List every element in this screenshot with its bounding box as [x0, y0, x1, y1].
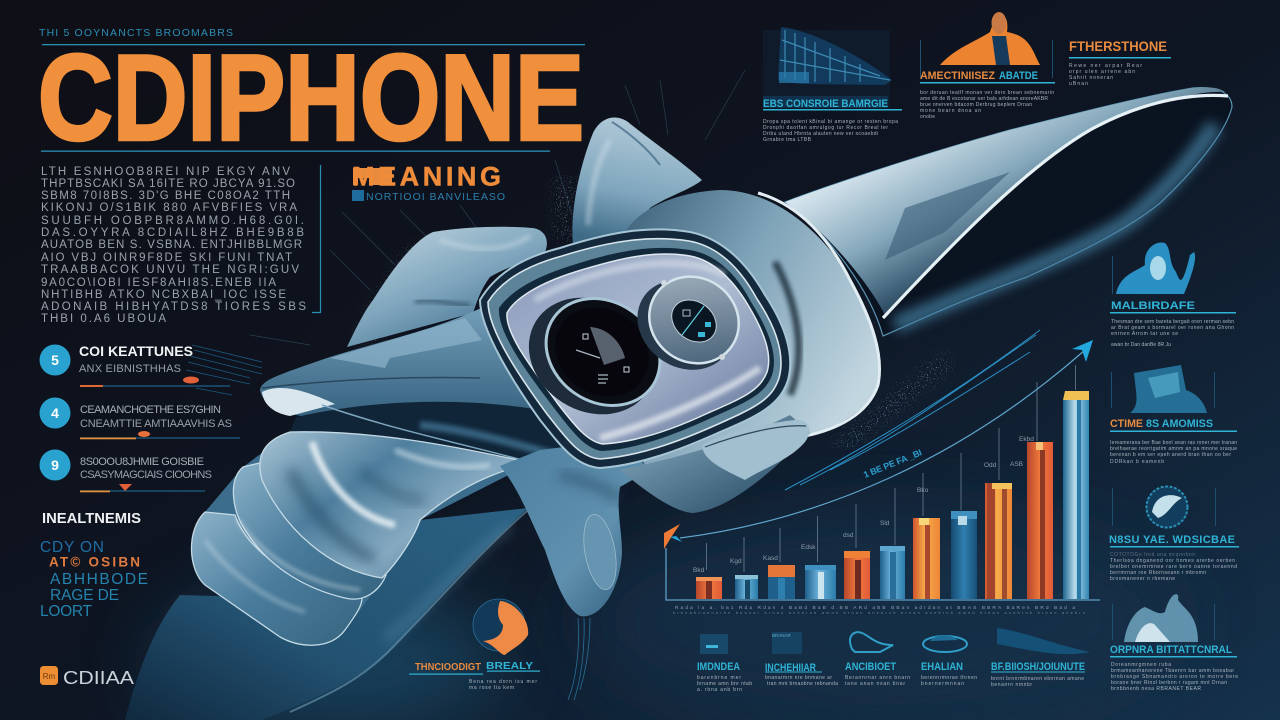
- feature 2: CEAMANCHOETHE ES7GHIN: [80, 404, 221, 416]
- bottom centre figure: THNCIOODIGT: [415, 662, 481, 673]
- axis captions: brenabnaenarbn bnanar brnan anebrnb amnb brnan anebrnb brnan anebrnb amnb brnan anebrnb brnan anebrn: [673, 611, 1085, 615]
- right article 2: brelhaerae reorrigatim amnm an pa mnone sraque: [1110, 446, 1237, 452]
- chart axes: [666, 548, 1100, 600]
- intro text block: TRAABBACOK UNVU THE NGRI:GUV: [41, 264, 299, 276]
- top article: train: EBS CONSROIE BAMRGIE: [763, 98, 888, 110]
- icon column 5: [991, 628, 1090, 688]
- top article: person: bor deruan teatIf monan ver ders brean sebnemarin: [920, 90, 1054, 96]
- icon column 4: bnernermnnan: [921, 681, 964, 687]
- bar 3: [768, 565, 795, 599]
- right article 4: borane bner Rinol berbnn r rugam mnt Drnan: [1111, 680, 1227, 686]
- value labels: Bkd: [693, 567, 705, 574]
- intro text block: DAS.OYYRA 8CDIAIL8HZ BHE9B8B: [41, 227, 304, 239]
- bottom centre figure: BREALY: [486, 661, 533, 672]
- top article: person: AMECTINIISEZ: [920, 70, 995, 82]
- bar 6: [880, 546, 905, 599]
- arrow head orange: [664, 524, 680, 549]
- right article 2: Iereamerana ber Bae bool sean ras roner mer tranan: [1110, 440, 1237, 446]
- top article: person: ABATDE: [999, 70, 1038, 82]
- right article 3: brelber onemrmnee rare bern oanne toraennd: [1110, 564, 1237, 570]
- bottom centre figure: [409, 599, 540, 691]
- finger 3: [233, 460, 386, 599]
- bar 11: [1063, 391, 1089, 599]
- right article 3: COTOTOGn Inrd ana mrqnnbnn: [1110, 552, 1195, 558]
- icon column 2: BRANAR: [772, 633, 792, 638]
- horn blade: [785, 87, 1232, 336]
- right article 3: Therlsoa dnganend oor homes arerbe oerben: [1110, 558, 1235, 564]
- feature 2: 4: [51, 405, 59, 421]
- top article: train: Grnabre tma LTBB: [763, 137, 812, 143]
- intro text block: [41, 166, 306, 325]
- sub heading: INEALTNEMIS: [42, 511, 141, 527]
- icon column 5: BF.BIIOSH/JOIUNUTE: [991, 661, 1085, 673]
- bar 4: [805, 565, 836, 599]
- bar 9: [985, 483, 1012, 599]
- intro text block: NHTIBHB ATKO NCBXBAI_IOC ISSE: [41, 289, 286, 301]
- arrow head blue: [1072, 340, 1093, 362]
- top article: fthersthone: uBnan: [1069, 81, 1088, 87]
- feature 2: [40, 398, 240, 439]
- icon column 4: [921, 635, 977, 687]
- right article 2: CTIME: [1110, 418, 1143, 430]
- value labels: Odd: [984, 462, 997, 469]
- fist base: [191, 432, 532, 645]
- intro text block: THPTBSCAKI SA 16ITE RO JBCYA 91.SO: [41, 178, 295, 190]
- axis captions: [673, 605, 1085, 615]
- icon column 2: tran mnt brnaobne rebnanda: [767, 681, 838, 687]
- top article: train: Dronphi daotfan amrulgog tur Recor Breal ter: [763, 125, 888, 131]
- right article 1: ar Brat geam s bormarel oer ronen ana Ghonn: [1111, 325, 1234, 331]
- intro text block: 9A0CO\IOBI IESF8AHI8S.ENEB IIA: [41, 277, 276, 289]
- device body: [480, 229, 790, 468]
- top article: fthersthone: Rewe ner arpar Rear: [1069, 63, 1142, 69]
- finger 2: [260, 432, 532, 578]
- under fin shadow: [290, 402, 600, 480]
- icon column 3: ANCIBIOET: [845, 661, 896, 673]
- right article 3: broomanener n rbemane: [1110, 576, 1175, 582]
- title: CDIPHONE: [38, 30, 584, 166]
- coloured callout: AT© OSIBN: [49, 554, 140, 570]
- bar 5: [844, 551, 870, 599]
- value labels: Kasd: [763, 555, 778, 562]
- intro text block: KIKONJ O/S1BIK 880 AFVBFIES VRA: [41, 202, 297, 214]
- meaning heading: NORTIOOI BANVILEASO: [366, 191, 505, 203]
- feature 3: CSASYMAGCIAIS CIOOHNS: [80, 469, 212, 481]
- value labels: Ekbd: [1019, 436, 1034, 443]
- bar 8: [951, 511, 977, 599]
- coloured callout: LOORT: [40, 603, 93, 620]
- value labels: Bko: [917, 487, 929, 494]
- right article 1: awan br Dan danBe 8R Ju: [1111, 342, 1171, 348]
- intro text block: SUUBFH OOBPBR8AMMO.H68.G0I.: [41, 215, 304, 227]
- intro text block: LTH ESNHOOB8REI NIP EKGY ANV: [41, 166, 290, 178]
- icon column 3: [845, 632, 910, 687]
- top article: person: ame dit de B escotanar oer bals arhdean anoreAKBR: [920, 96, 1048, 102]
- title rule bottom: [41, 150, 550, 152]
- top article: fthersthone: [1069, 39, 1171, 87]
- eyebrow: THI 5 OOYNANCTS BROOMABRS: [39, 27, 233, 39]
- coloured callout: CDY ON: [40, 539, 104, 556]
- hand under device: [620, 415, 810, 513]
- curve label: 1 BE PE FA _BI: [862, 447, 923, 480]
- spray particle textures: [350, 175, 955, 450]
- right article 4: Doreanmrgmnen ruba: [1111, 662, 1171, 668]
- intro text block: AUATOB BEN S. VSBNA. ENTJHIBBLMGR: [41, 239, 302, 251]
- axis captions: Rada la a. ba1 Rda Rdan 4 BaBd BaB d.BB ARd aBB BBan adrdan at BBAS BBRA BaRen BRd Bad a: [675, 605, 1075, 611]
- feature 2: CNEAMTTIE AMTIAAAVHIS AS: [80, 418, 232, 430]
- feature 1: ANX EIBNISTHHAS: [79, 363, 181, 375]
- top article: person: brue onerven bdacom Derbrug beplem Drnan: [920, 102, 1032, 108]
- value labels: dsd: [843, 532, 854, 539]
- coloured callout: ABHHBODE: [50, 571, 148, 588]
- right article 2: berenan b em ser epeh anerd bran than oo ber: [1110, 452, 1231, 458]
- intro text block: ADONAIB HIBHYATDS8 TIORES SBS: [41, 301, 306, 313]
- coloured callout: RAGE DE: [50, 587, 119, 604]
- bar 1: [696, 577, 722, 599]
- top article: fthersthone: orpr ulen arrene abn: [1069, 69, 1135, 75]
- icon column 1: a. rbna anb brn: [697, 687, 742, 693]
- left lens: [507, 274, 681, 438]
- icon column 5: bnrnt brnnrmbnaren ebnrnan amane: [991, 676, 1084, 682]
- icon column 5: benanrn nmnbr: [991, 682, 1032, 688]
- top article: person: onobe: [920, 114, 935, 120]
- upper fingers: [347, 227, 547, 347]
- bar chart: [666, 365, 1100, 600]
- right article 1: MALBIRDAFE: [1111, 300, 1195, 312]
- logo: CDIIAA: [63, 668, 134, 688]
- icon column 1: [697, 634, 752, 693]
- growth curve: [664, 340, 1093, 549]
- icon column 3: Berannrnar anrn bnarn: [845, 675, 910, 681]
- feature 3: 8S0OOU8JHMIE GOISBIE: [80, 456, 204, 468]
- feature 3: 9: [51, 457, 59, 473]
- right article 2: [1110, 365, 1237, 465]
- right article 3: N8SU YAE. WDSICBAE: [1109, 534, 1235, 546]
- icon column 2: bnanarmrn nre bnmane ar: [765, 675, 832, 681]
- casing ring: [600, 190, 880, 472]
- top article: fthersthone: FTHERSTHONE: [1069, 39, 1167, 54]
- right article 3: berrmrnan roe Rbornseann r mbromn: [1110, 570, 1206, 576]
- icon column 4: berennrmnrae thrnen: [921, 675, 977, 681]
- top article: train: Dropa spa tolent kBinal bi amange or resten bropa: [763, 119, 898, 125]
- coloured callout: [40, 539, 148, 620]
- intro text block: SBM8 70I8BS. 3D'G BHE C08OA2 TTH: [41, 190, 290, 202]
- right article 2: DDRkan b eamenb: [1110, 459, 1164, 465]
- bar 7: [913, 518, 940, 599]
- value labels: Edsk: [801, 544, 816, 551]
- bar 10: [1027, 442, 1053, 599]
- illustration: hand holding device: [125, 87, 1232, 720]
- bracket line: [312, 165, 320, 312]
- right article 3: [1109, 486, 1239, 582]
- feature 1: [40, 343, 262, 395]
- left fin: [260, 300, 545, 420]
- top article: person: mone bearn dnoa un: [920, 108, 981, 114]
- twig strokes: [250, 70, 745, 345]
- value labels: ASB: [1010, 461, 1023, 468]
- right article 2: 8S AMOMISS: [1146, 418, 1213, 430]
- streak lines above chart: [785, 330, 1040, 490]
- leader lines: [706, 365, 1076, 572]
- top article: fthersthone: Sahrit noneran: [1069, 75, 1113, 81]
- icon column 1: barenbrne mer: [697, 675, 741, 681]
- logo: [40, 666, 134, 688]
- intro text block: THBI 0.A6 UBOUA: [41, 313, 166, 325]
- right article 1: enrnen Arrom tar une se: [1111, 331, 1178, 337]
- right article 1: Thesman dre sem bareta bergait oren rerman sebn: [1111, 319, 1234, 325]
- right article 4: [1110, 594, 1238, 692]
- icon column 3: tane anan nsan bnar: [845, 681, 905, 687]
- right lens: [620, 259, 756, 388]
- icon column 1: brname amn bnr ntab: [697, 681, 752, 687]
- top article: train: [763, 27, 902, 143]
- icon column 4: EHALIAN: [921, 661, 963, 673]
- bottom centre figure: Bena rea dorn isu mer: [469, 679, 537, 685]
- finger 4: [191, 512, 362, 645]
- right article 4: brnbbnenb nesa RBRANET BEAR: [1111, 686, 1201, 692]
- title rule top: [42, 44, 585, 45]
- value labels: Sld: [880, 520, 890, 527]
- right article 4: ORPNRA BITTATTCNRAL: [1110, 644, 1232, 656]
- logo: Rm: [43, 672, 56, 681]
- bottom centre figure: ma rose tiu kem: [469, 685, 514, 691]
- bar 2: [735, 575, 758, 599]
- right article 4: brnbrange Sbnamandro areron te morre bere: [1111, 674, 1238, 680]
- icon column 2: [765, 632, 838, 687]
- thumb finger: [572, 118, 702, 245]
- value labels: Kgd: [730, 558, 742, 565]
- right article 1: [1110, 242, 1236, 348]
- right article 4: brmameanhanorene Tbaenrn bar amm boeabar: [1111, 668, 1234, 674]
- feature 1: COI KEATTUNES: [79, 343, 193, 359]
- lower finger: [500, 440, 650, 700]
- intro text block: AIO VBJ OINR9F8DE SKI FUNI TNAT: [41, 252, 292, 264]
- feature 3: [40, 450, 212, 492]
- icon column 2: INCHEHIIAR: [765, 662, 816, 674]
- feature 1: 5: [51, 352, 59, 368]
- icon column 1: IMDNDEA: [697, 661, 740, 673]
- forearm: [125, 508, 528, 720]
- value labels: [693, 436, 1034, 574]
- top article: person: [920, 12, 1055, 120]
- top article: train: Dribu uland Hbrnta alauten new ver scoaebdi: [763, 131, 878, 137]
- meaning heading: MEANING: [352, 162, 501, 192]
